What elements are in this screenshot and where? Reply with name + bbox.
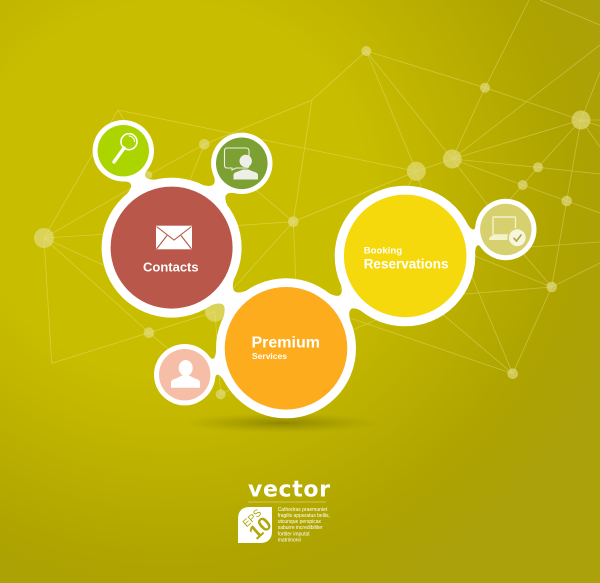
badge text: eps: EPS	[240, 507, 264, 530]
panel: chat	[216, 138, 268, 189]
fine print	[278, 507, 330, 543]
label: services: Services	[252, 351, 287, 361]
fine print: fragilis apparatus bellis,	[278, 513, 330, 519]
logo rule	[248, 501, 326, 503]
icon: laptop with check	[489, 217, 527, 248]
logo: vector: vector	[248, 478, 330, 502]
panel: premium services	[225, 287, 347, 410]
mesh lines	[44, 0, 600, 394]
white connected ring frame	[93, 120, 536, 418]
fine print: saburre incredibiliter	[278, 525, 323, 531]
fine print: matrimonii	[278, 537, 301, 543]
icon: speech bubble and person	[224, 148, 258, 180]
panel: profile	[159, 349, 210, 400]
label: booking: Booking	[364, 245, 402, 256]
badge text: 10: 10	[245, 513, 276, 544]
panel: laptop	[480, 204, 532, 255]
fine print: Cathedras praemuniet	[278, 507, 328, 513]
mesh nodes	[34, 46, 590, 399]
panel: booking reservations	[344, 195, 467, 317]
icon: magnifier	[114, 134, 137, 162]
badge: eps 10	[238, 507, 276, 544]
drop shadow	[182, 413, 382, 433]
label: contacts: Contacts	[143, 259, 199, 274]
label: reservations: Reservations	[364, 256, 448, 271]
panel: contacts	[111, 187, 233, 309]
icon: envelope	[156, 226, 192, 249]
label: premium: Premium	[252, 335, 320, 352]
panel: search	[98, 125, 149, 176]
fine print: utcunque perspicax	[278, 519, 322, 525]
icon: person	[171, 360, 200, 388]
fine print: fortiter imputat	[278, 531, 310, 537]
network mesh	[34, 0, 600, 399]
